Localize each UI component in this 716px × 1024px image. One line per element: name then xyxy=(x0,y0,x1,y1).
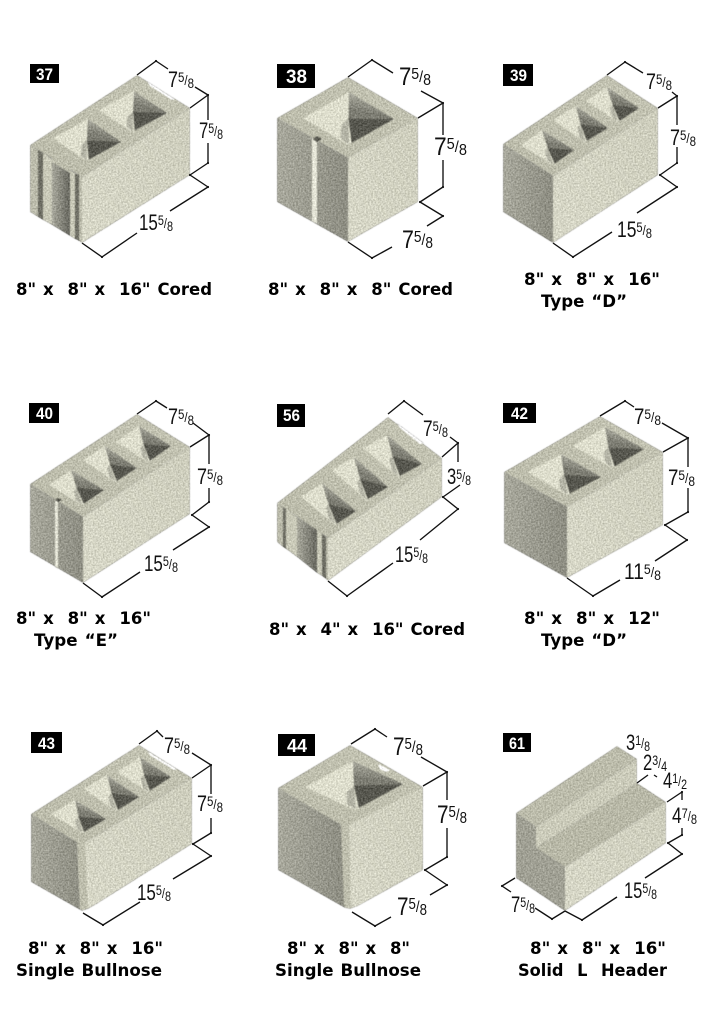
dimensions 56: 8 xyxy=(422,550,428,566)
dimensions 40: / xyxy=(213,469,217,485)
dimensions 40: 5 xyxy=(207,466,214,482)
caption 39 xyxy=(524,270,660,311)
dimensions 37: 8 xyxy=(167,218,173,234)
dimensions 61: 7 xyxy=(682,805,688,821)
dimensions 39: / xyxy=(662,74,666,90)
dimensions 37: / xyxy=(214,123,217,139)
dimensions 56: 5 xyxy=(456,466,462,482)
dimensions 42: 5 xyxy=(644,406,651,422)
dimensions 42: 8 xyxy=(654,567,661,583)
badge 42: 42 xyxy=(511,404,528,423)
panel: block 37 xyxy=(16,61,223,299)
panel: block 40 xyxy=(16,401,223,650)
dimensions 56: 15 xyxy=(395,542,419,567)
badge 44 xyxy=(278,734,315,756)
badge 39: 39 xyxy=(510,66,527,85)
dimensions 42: / xyxy=(651,564,654,580)
caption 42: Type “D” xyxy=(541,631,627,650)
dimensions 40: 7 xyxy=(197,464,209,489)
dimensions 43: / xyxy=(180,738,184,754)
panel: block 43 xyxy=(16,731,223,980)
dimensions 39: 8 xyxy=(690,133,696,149)
dimensions 44 xyxy=(351,729,467,926)
dimensions 43 xyxy=(83,731,223,925)
dimensions 43: / xyxy=(213,796,217,812)
dimensions 37: 8 xyxy=(217,126,223,142)
dimensions 61: 2 xyxy=(681,776,687,792)
dimensions 56 xyxy=(328,401,471,596)
block 38 drawing xyxy=(277,77,418,242)
block 40 drawing xyxy=(30,414,190,583)
dimensions 61: 1 xyxy=(635,732,641,748)
block 44 drawing xyxy=(278,745,423,909)
dimensions 43: 15 xyxy=(137,880,161,905)
dimensions 44: 8 xyxy=(460,810,467,827)
dimensions 43: / xyxy=(162,885,165,901)
dimensions 61: 5 xyxy=(520,894,526,910)
dimensions 38: / xyxy=(455,139,459,156)
dimensions 61: 8 xyxy=(651,886,657,902)
caption 39: 8" x 8" x 16" xyxy=(524,270,660,289)
dimensions 39: / xyxy=(643,222,646,238)
dimensions 61: / xyxy=(641,735,644,751)
caption 40 xyxy=(16,609,151,650)
block 43 drawing xyxy=(31,745,192,911)
badge 40: 40 xyxy=(36,404,53,423)
dimensions 56: 8 xyxy=(442,424,448,440)
badge 38: 38 xyxy=(286,67,307,88)
dimensions 42: 7 xyxy=(668,465,680,490)
dimensions 38: 7 xyxy=(402,226,416,254)
panel: block 44 xyxy=(275,729,467,980)
dimensions 56: 5 xyxy=(413,544,419,560)
dimensions 43: 8 xyxy=(184,741,190,757)
dimensions 39: 5 xyxy=(636,219,643,235)
dimensions 39: 7 xyxy=(646,69,658,94)
dimensions 37 xyxy=(82,61,223,257)
dimensions 37: 5 xyxy=(178,69,185,85)
dimensions 38: / xyxy=(422,232,426,249)
dimensions 39 xyxy=(553,62,696,257)
dimensions 56: / xyxy=(462,469,465,485)
dimensions 43: 5 xyxy=(156,882,162,898)
dimensions 44: 8 xyxy=(420,902,427,919)
dimensions 44: 5 xyxy=(409,896,416,913)
panel: block 39 xyxy=(503,62,696,311)
dimensions 40: / xyxy=(169,556,172,572)
dimensions 38: 5 xyxy=(411,66,419,83)
dimensions 61: / xyxy=(648,883,651,899)
dimensions 43: 5 xyxy=(207,793,214,809)
caption 61: Solid L Header xyxy=(518,961,668,980)
dimensions 38: 8 xyxy=(425,235,433,252)
caption 61 xyxy=(518,939,668,980)
caption 43: Single Bullnose xyxy=(16,961,162,980)
dimensions 37: 8 xyxy=(188,75,194,91)
badge 44: 44 xyxy=(287,736,307,756)
dimensions 40: 15 xyxy=(144,551,168,576)
dimensions 61: / xyxy=(678,773,681,789)
dimensions 40: 5 xyxy=(163,553,169,569)
dimensions 42: / xyxy=(685,470,688,486)
dimensions 42: 7 xyxy=(634,404,646,429)
caption 42 xyxy=(524,609,660,650)
badge 61: 61 xyxy=(509,734,525,753)
dimensions 38: 8 xyxy=(423,72,431,89)
dimensions 61: / xyxy=(526,897,529,913)
dimensions 61: / xyxy=(658,755,661,771)
dimensions 38: 5 xyxy=(447,136,455,153)
dimensions 61: 1 xyxy=(672,770,678,786)
caption 43: 8" x 8" x 16" xyxy=(28,939,163,958)
dimensions 43: 5 xyxy=(174,735,181,751)
dimensions 43: 7 xyxy=(164,733,176,758)
dimensions 56: 5 xyxy=(433,418,439,434)
block 37 drawing xyxy=(30,75,190,243)
panel: block 56 xyxy=(269,401,471,639)
dimensions 61: 8 xyxy=(529,900,535,916)
caption 37: 8" x 8" x 16" Cored xyxy=(16,280,212,299)
panel: block 42 xyxy=(503,401,695,650)
dimensions 44: 5 xyxy=(405,736,412,753)
badge 38 xyxy=(277,64,315,88)
caption 44 xyxy=(275,939,421,980)
badge 39 xyxy=(503,64,533,86)
dimensions 56: / xyxy=(439,421,442,437)
dimensions 61: 4 xyxy=(663,768,675,793)
badge 37 xyxy=(30,64,59,84)
dimensions 42: 8 xyxy=(654,412,661,428)
dimensions 44: 7 xyxy=(437,801,451,829)
dimensions 61: 3 xyxy=(652,752,658,768)
dimensions 61: 4 xyxy=(672,803,684,828)
dimensions 44: 5 xyxy=(449,804,456,821)
dimensions 39: 15 xyxy=(617,217,641,242)
dimensions 61: 8 xyxy=(644,738,650,754)
dimensions 61: 4 xyxy=(661,758,667,774)
dimensions 40: 5 xyxy=(178,406,185,422)
dimensions 42: 5 xyxy=(678,467,685,483)
dimensions 39: 8 xyxy=(646,225,652,241)
badge 40 xyxy=(29,403,59,423)
panel: block 38 xyxy=(268,60,467,299)
caption 40: 8" x 8" x 16" xyxy=(16,609,151,628)
dimensions 38: 7 xyxy=(399,63,413,91)
dimensions 38: 7 xyxy=(434,133,448,161)
dimensions 61: 7 xyxy=(511,892,523,917)
dimensions 42: 8 xyxy=(688,473,695,489)
dimensions 61: 2 xyxy=(643,750,655,775)
badge 37: 37 xyxy=(36,65,53,84)
block 56 drawing xyxy=(277,417,442,581)
dimensions 44: 7 xyxy=(397,893,411,921)
dimensions 40: 7 xyxy=(168,404,180,429)
dimensions 44: 7 xyxy=(393,733,407,761)
badge 42 xyxy=(503,403,536,423)
panel: block 61 xyxy=(502,730,697,980)
dimensions 37: 5 xyxy=(158,212,164,228)
dimensions 42 xyxy=(567,401,695,596)
dimensions 37: / xyxy=(184,72,188,88)
badge 56: 56 xyxy=(283,406,300,425)
dimensions 39: 5 xyxy=(656,71,663,87)
dimensions 56: 7 xyxy=(423,416,435,441)
dimensions 38: / xyxy=(419,69,424,86)
dimensions 40: 8 xyxy=(188,412,194,428)
dimensions 56: 3 xyxy=(447,464,459,489)
dimensions 44: / xyxy=(456,807,460,824)
dimensions 42: 5 xyxy=(644,561,651,577)
dimensions 56: / xyxy=(419,547,422,563)
caption 43 xyxy=(16,939,163,980)
caption 40: Type “E” xyxy=(34,631,118,650)
dimensions 61 xyxy=(502,730,697,920)
dimensions 37: / xyxy=(164,215,167,231)
dimensions 42: 11 xyxy=(624,559,647,584)
block 39 drawing xyxy=(503,75,658,243)
dimensions 40: / xyxy=(184,409,188,425)
dimensions 40 xyxy=(83,401,223,597)
dimensions 38: 8 xyxy=(459,142,467,159)
dimensions 37: 7 xyxy=(168,67,180,92)
dimensions 61: 5 xyxy=(642,880,648,896)
caption 39: Type “D” xyxy=(541,292,627,311)
dimensions 39: 7 xyxy=(670,125,682,150)
badge 56 xyxy=(277,404,305,427)
badge 61 xyxy=(503,733,531,753)
caption 44: Single Bullnose xyxy=(275,961,421,980)
dimensions 61: / xyxy=(688,808,691,824)
dimensions 61: 8 xyxy=(691,811,697,827)
caption 44: 8" x 8" x 8" xyxy=(287,939,410,958)
dimensions 56: 8 xyxy=(465,472,471,488)
dimensions 37: 5 xyxy=(208,120,214,136)
dimensions 37: 15 xyxy=(139,210,163,235)
dimensions 38 xyxy=(348,60,467,258)
caption 61: 8" x 8" x 16" xyxy=(530,939,666,958)
dimensions 43: 7 xyxy=(197,791,209,816)
dimensions 39: 5 xyxy=(680,127,687,143)
dimensions 40: 8 xyxy=(172,559,178,575)
dimensions 38: 5 xyxy=(414,229,422,246)
caption 56: 8" x 4" x 16" Cored xyxy=(269,620,465,639)
badge 43: 43 xyxy=(38,734,55,753)
dimensions 39: / xyxy=(686,130,690,146)
caption 38: 8" x 8" x 8" Cored xyxy=(268,280,453,299)
dimensions 37: 7 xyxy=(199,118,211,143)
caption 42: 8" x 8" x 12" xyxy=(524,609,660,628)
dimensions 39: 8 xyxy=(666,77,672,93)
badge 43 xyxy=(31,732,62,753)
block 61 drawing xyxy=(516,746,666,911)
dimensions 42: / xyxy=(651,409,654,425)
dimensions 43: 8 xyxy=(165,888,171,904)
dimensions 44: / xyxy=(416,899,420,916)
dimensions 43: 8 xyxy=(217,799,223,815)
dimensions 61: 3 xyxy=(626,730,638,755)
dimensions 61: 15 xyxy=(624,878,648,903)
dimensions 44: / xyxy=(412,739,416,756)
dimensions 44: 8 xyxy=(416,742,423,759)
block 42 drawing xyxy=(504,416,663,578)
dimensions 40: 8 xyxy=(217,472,223,488)
